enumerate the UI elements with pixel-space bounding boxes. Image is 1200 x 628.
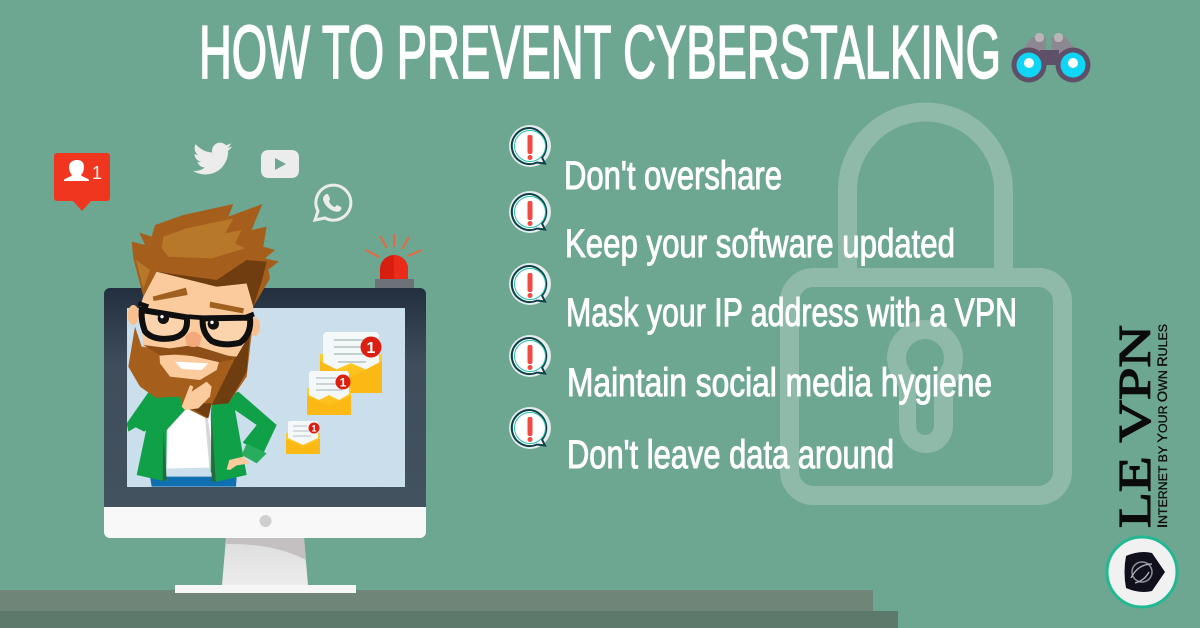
tip 3: alert icon — [509, 263, 551, 305]
jacket — [127, 390, 277, 482]
face — [140, 272, 253, 357]
monitor screen — [127, 308, 405, 487]
tip 5: alert icon — [509, 407, 551, 449]
tip 2: alert icon — [509, 191, 551, 233]
desk — [0, 590, 898, 628]
large email: 1 — [367, 340, 376, 357]
logo badge — [1107, 537, 1177, 607]
small email: 1 — [311, 424, 317, 434]
tip 4: text: Maintain social media hygiene — [567, 361, 992, 405]
monitor bezel — [104, 288, 426, 508]
medium email: 1 — [340, 376, 347, 390]
icon: friend notification — [54, 153, 110, 211]
tip 3: text: Mask your IP address with a VPN — [566, 291, 1017, 335]
monitor — [104, 288, 426, 593]
mustache — [143, 345, 237, 362]
tip 4: alert icon — [509, 335, 551, 377]
logo wordmark: Le VPN: LE VPN — [1110, 325, 1160, 528]
chin — [159, 353, 220, 380]
icon: friend notification: 1 — [92, 163, 102, 183]
other hand — [227, 457, 250, 470]
beard — [128, 327, 252, 418]
icon: youtube — [261, 150, 299, 178]
monitor stand — [175, 538, 356, 593]
character: bearded man — [127, 204, 279, 487]
jeans — [150, 477, 237, 487]
icon: whatsapp — [315, 185, 351, 220]
monitor chin — [104, 507, 426, 538]
shirt — [167, 408, 215, 469]
smile — [175, 362, 208, 370]
icon: binoculars — [1012, 33, 1090, 82]
nose — [185, 332, 202, 347]
emails — [286, 332, 382, 454]
hair — [132, 204, 279, 307]
glasses — [138, 303, 254, 344]
ears — [128, 305, 139, 325]
tip 1: text: Don't overshare — [564, 154, 782, 198]
hand — [182, 382, 212, 410]
logo tagline: INTERNET BY YOUR OWN RULES — [1154, 324, 1170, 528]
eyebrows — [153, 288, 188, 301]
icon: alarm siren — [366, 234, 422, 289]
tip 2: text: Keep your software updated — [565, 222, 955, 266]
tip 1: alert icon — [509, 125, 551, 167]
icon: twitter — [193, 143, 232, 174]
sleeve cuff — [128, 397, 184, 432]
neck shadow — [188, 403, 212, 418]
tip 5: text: Don't leave data around — [567, 433, 894, 477]
padlock watermark — [790, 112, 1062, 495]
